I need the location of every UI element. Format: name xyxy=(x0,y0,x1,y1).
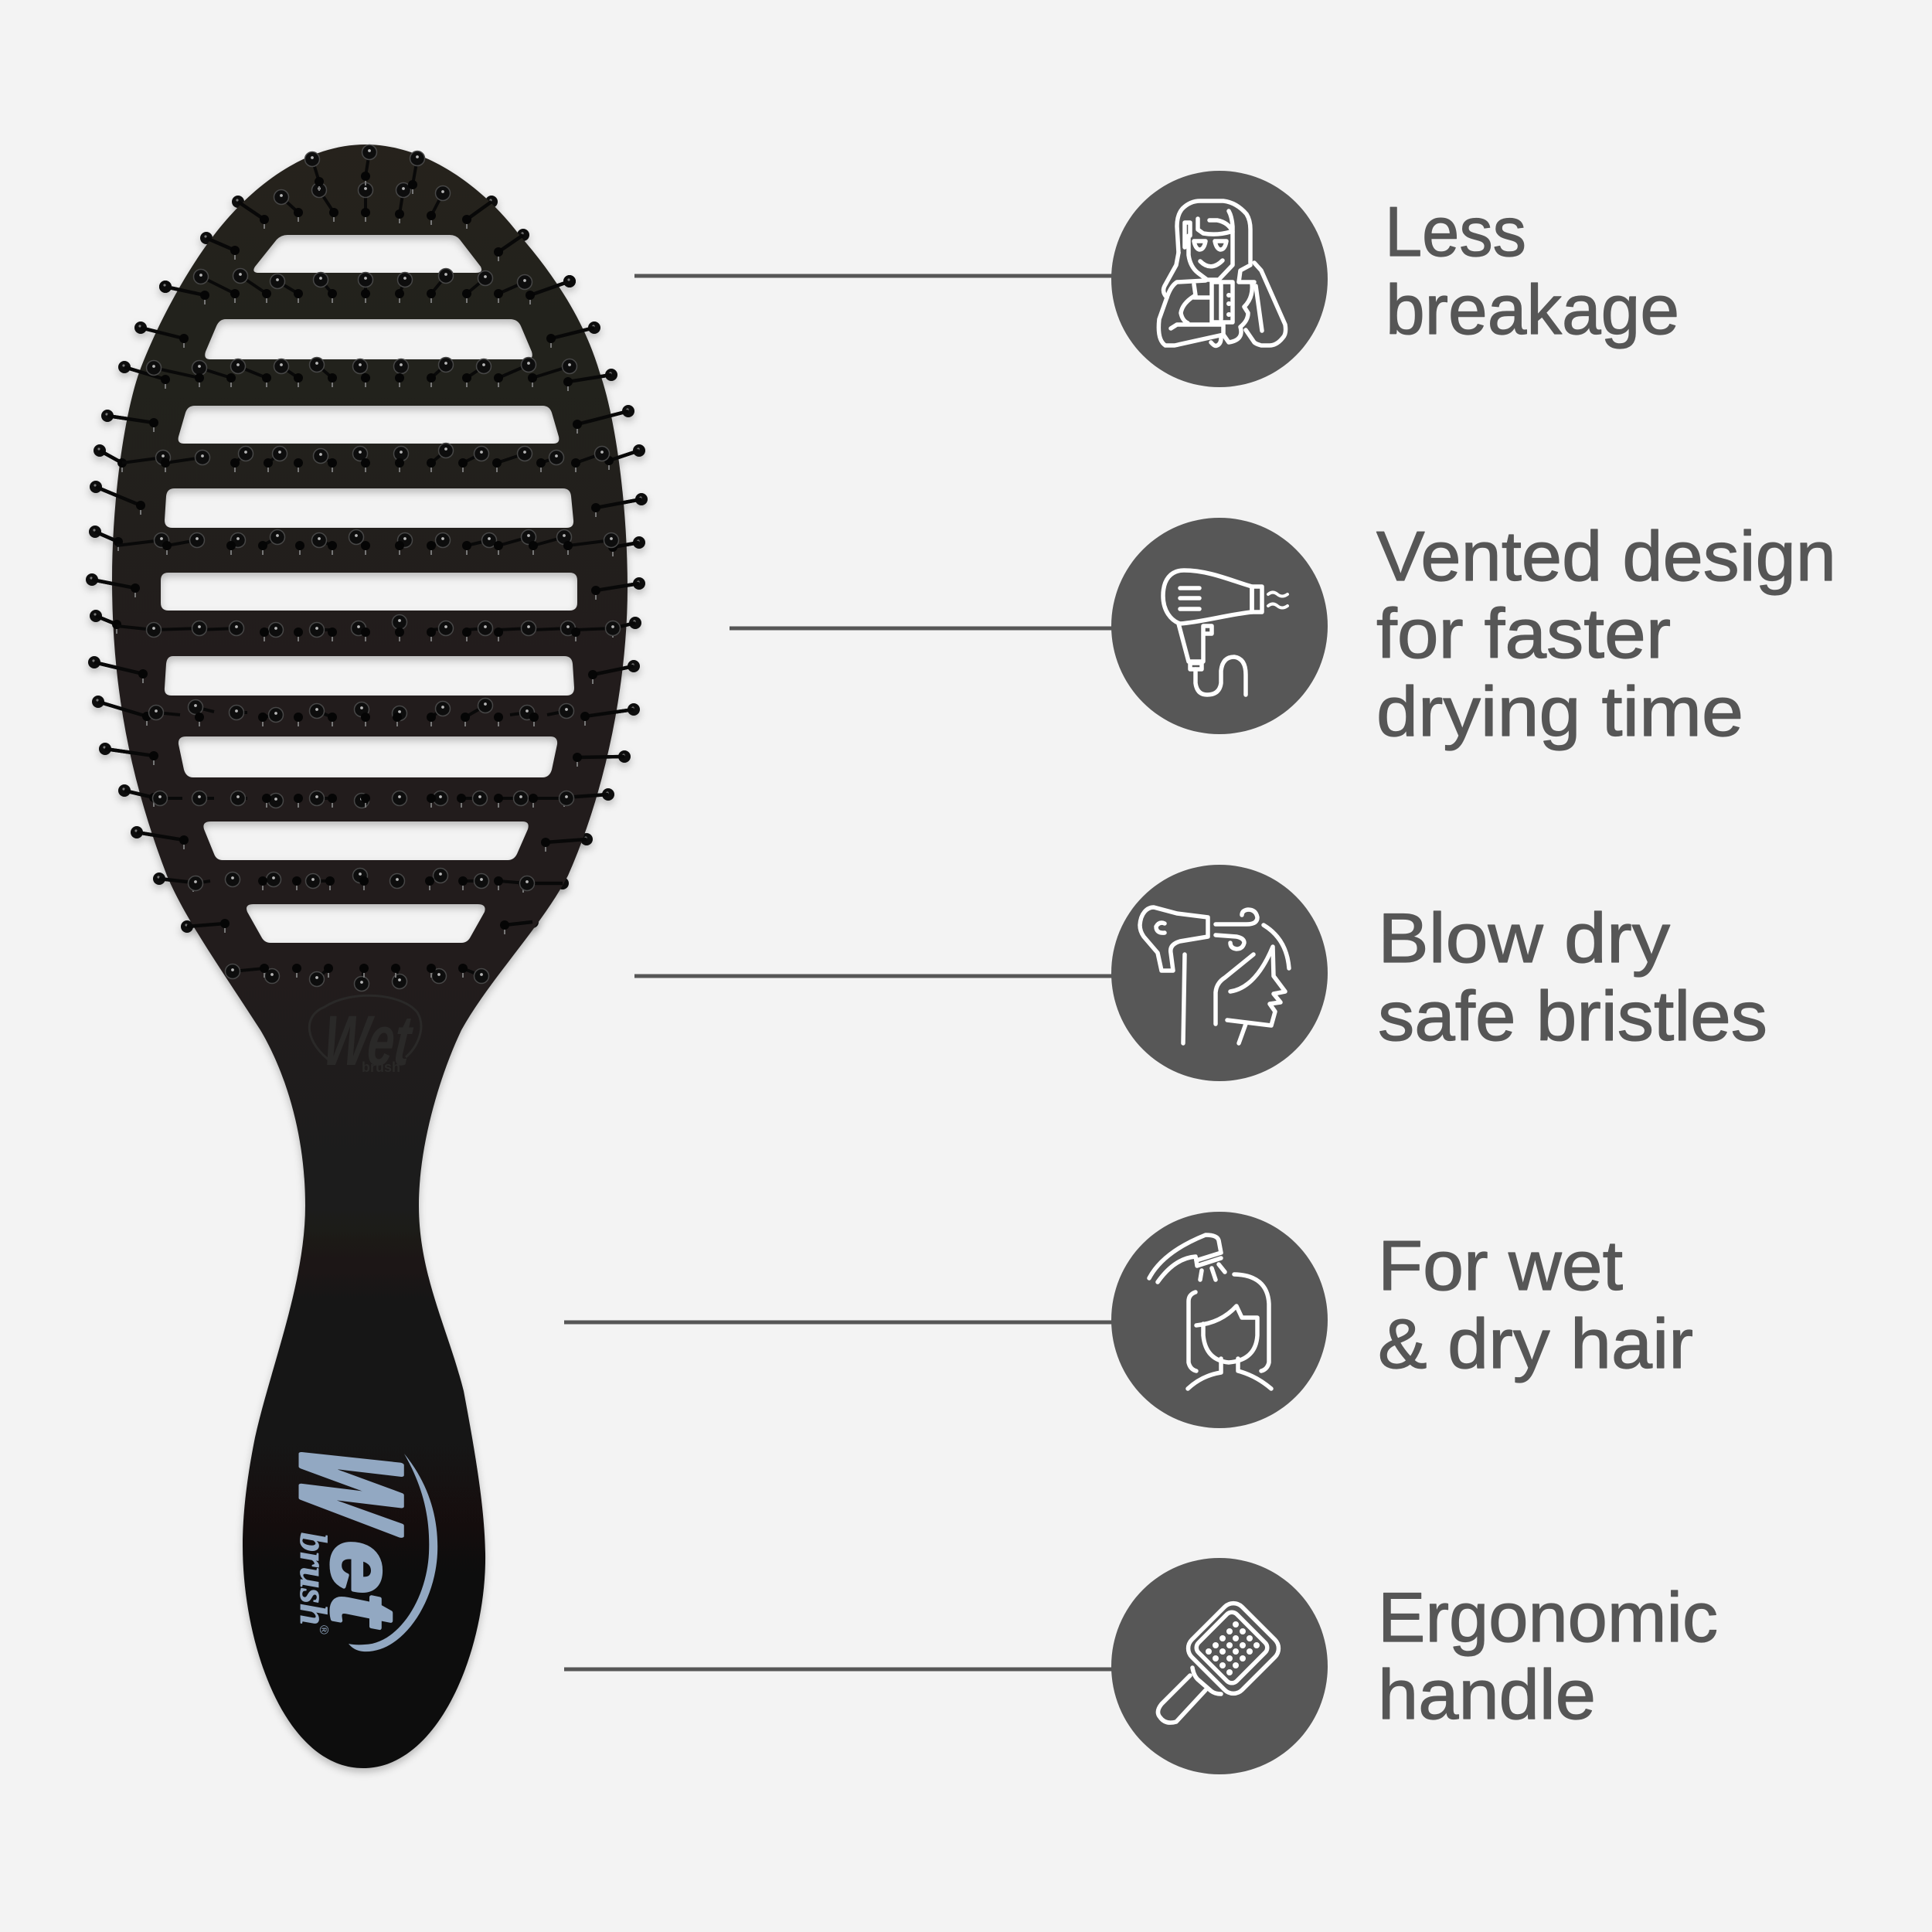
embossed neck logo: brush xyxy=(362,1060,400,1075)
icon: shower over head xyxy=(1149,1235,1271,1389)
label: safe bristles xyxy=(1378,978,1767,1056)
label: & dry hair xyxy=(1378,1305,1693,1383)
icon: paddle brush xyxy=(1158,1598,1284,1723)
label: Less xyxy=(1385,193,1526,271)
handle logo: et xyxy=(313,1541,413,1628)
embossed neck logo: Wet xyxy=(320,1000,417,1080)
label: For wet xyxy=(1378,1227,1623,1305)
callout: wet and dry hair xyxy=(564,1212,1693,1428)
callout: vented design xyxy=(730,518,1836,751)
callout: blow dry safe xyxy=(634,865,1767,1081)
label xyxy=(1378,1227,1693,1383)
bristle rows on vent bars xyxy=(117,145,620,991)
icon: dryer blowing on hair xyxy=(1140,907,1289,1043)
handle logo: W xyxy=(271,1440,431,1540)
icon: hair dryer with cord xyxy=(1163,570,1287,695)
handle logo xyxy=(271,1440,437,1651)
label: handle xyxy=(1378,1656,1596,1734)
handle logo: brush xyxy=(292,1532,335,1625)
embossed neck logo xyxy=(309,995,421,1080)
label xyxy=(1385,193,1679,349)
label: Blow dry xyxy=(1378,900,1671,978)
label: for faster xyxy=(1376,595,1671,673)
handle logo: ® xyxy=(317,1625,330,1634)
label: breakage xyxy=(1386,271,1679,349)
label: Vented design xyxy=(1376,518,1836,596)
callout: ergonomic handle xyxy=(564,1558,1718,1774)
label xyxy=(1378,900,1767,1056)
label xyxy=(1376,518,1836,751)
label: drying time xyxy=(1376,673,1743,751)
label: Ergonomic xyxy=(1378,1579,1718,1657)
side bristle bases on body xyxy=(92,202,641,934)
brush body with vents xyxy=(112,145,628,1768)
brush xyxy=(86,145,648,1768)
icon: woman brushing hair xyxy=(1158,201,1286,346)
side bristles xyxy=(86,196,648,933)
label xyxy=(1378,1579,1718,1734)
callout: less breakage xyxy=(634,171,1679,387)
